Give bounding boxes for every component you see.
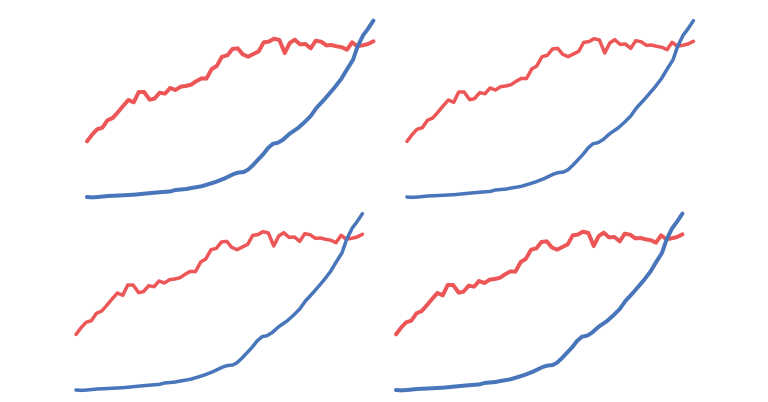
blue line bbox=[396, 214, 682, 390]
blue line bbox=[87, 21, 373, 197]
blue line bbox=[407, 21, 693, 197]
blue line bbox=[76, 214, 362, 390]
chart: top left bbox=[87, 21, 373, 197]
chart: top right bbox=[407, 21, 693, 197]
red line bbox=[407, 39, 693, 141]
red line bbox=[396, 232, 682, 334]
red line bbox=[76, 232, 362, 334]
red line bbox=[87, 39, 373, 141]
chart: bottom left bbox=[76, 214, 362, 390]
chart: bottom right bbox=[396, 214, 682, 390]
